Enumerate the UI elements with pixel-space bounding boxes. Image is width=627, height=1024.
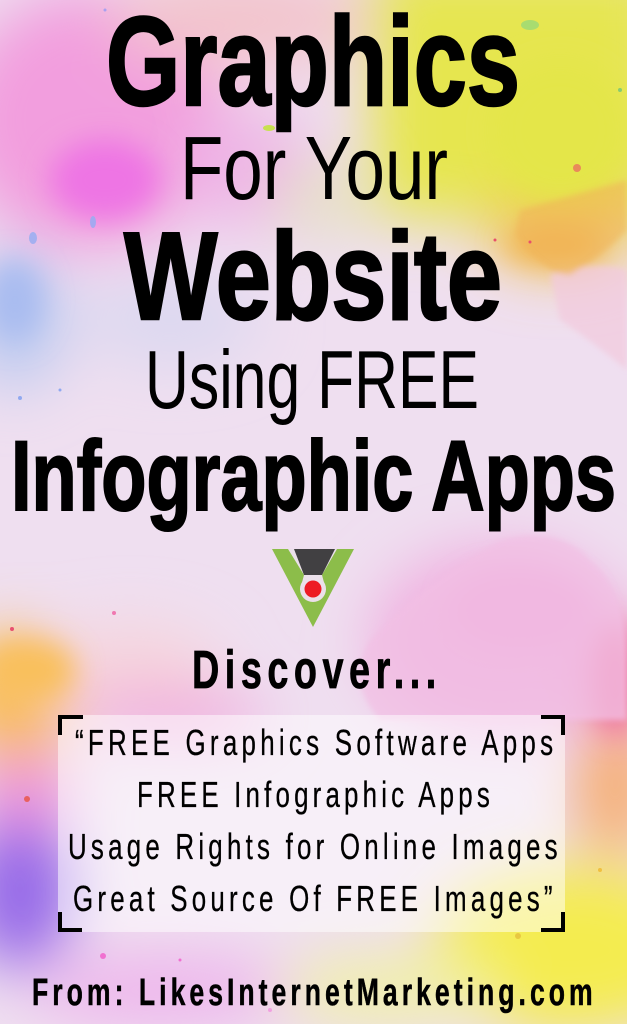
panel: discover list	[58, 715, 565, 932]
heading: Using FREE: Using FREE	[145, 333, 479, 426]
list item 3: Usage Rights for Online Images	[68, 827, 558, 867]
list item 1: “FREE Graphics Software Apps	[75, 723, 553, 763]
title: Website: Website	[124, 208, 502, 346]
heading: Discover: Discover...	[192, 639, 436, 700]
heading: For Your: For Your	[180, 119, 448, 219]
translucent panel	[58, 715, 565, 932]
icon: green V logo	[272, 549, 354, 627]
list item 2: FREE Infographic Apps	[137, 775, 490, 815]
footer: source: From: LikesInternetMarketing.com	[32, 970, 593, 1013]
corner brackets	[60, 717, 563, 930]
list item 4: Great Source Of FREE Images”	[73, 879, 553, 919]
